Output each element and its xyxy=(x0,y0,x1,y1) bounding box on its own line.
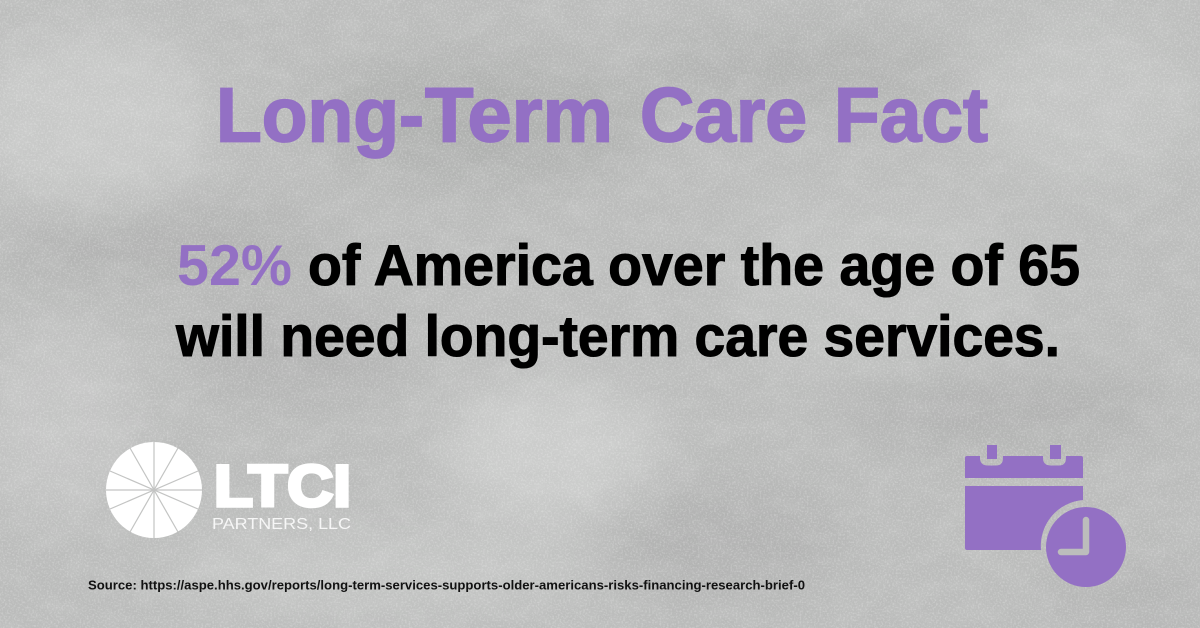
logo subtitle: PARTNERS, LLC xyxy=(212,516,351,533)
title: Term xyxy=(425,72,613,158)
title: Care xyxy=(640,72,807,158)
logo: LTCI Partners xyxy=(106,442,351,538)
title: Fact xyxy=(834,72,988,158)
calendar pegs xyxy=(987,445,1061,459)
statement line 1: of America over the age of 65 xyxy=(308,234,1080,298)
title: Long- xyxy=(216,72,424,158)
statement line 2: will need long-term care services. xyxy=(175,305,1060,369)
logo wheel xyxy=(106,442,202,538)
clock xyxy=(1046,507,1126,587)
statement text xyxy=(175,234,1080,369)
statement line 1: 52% xyxy=(177,234,292,298)
calendar header xyxy=(965,456,1083,478)
icon: calendar with clock xyxy=(965,445,1126,587)
logo wordmark: LTCI xyxy=(214,454,351,519)
source line: Source: https://aspe.hhs.gov/reports/long-term-services-supports-older-americans-risks-financing-research-brief-0 xyxy=(88,578,805,592)
calendar body xyxy=(965,486,1083,550)
title xyxy=(216,72,988,158)
